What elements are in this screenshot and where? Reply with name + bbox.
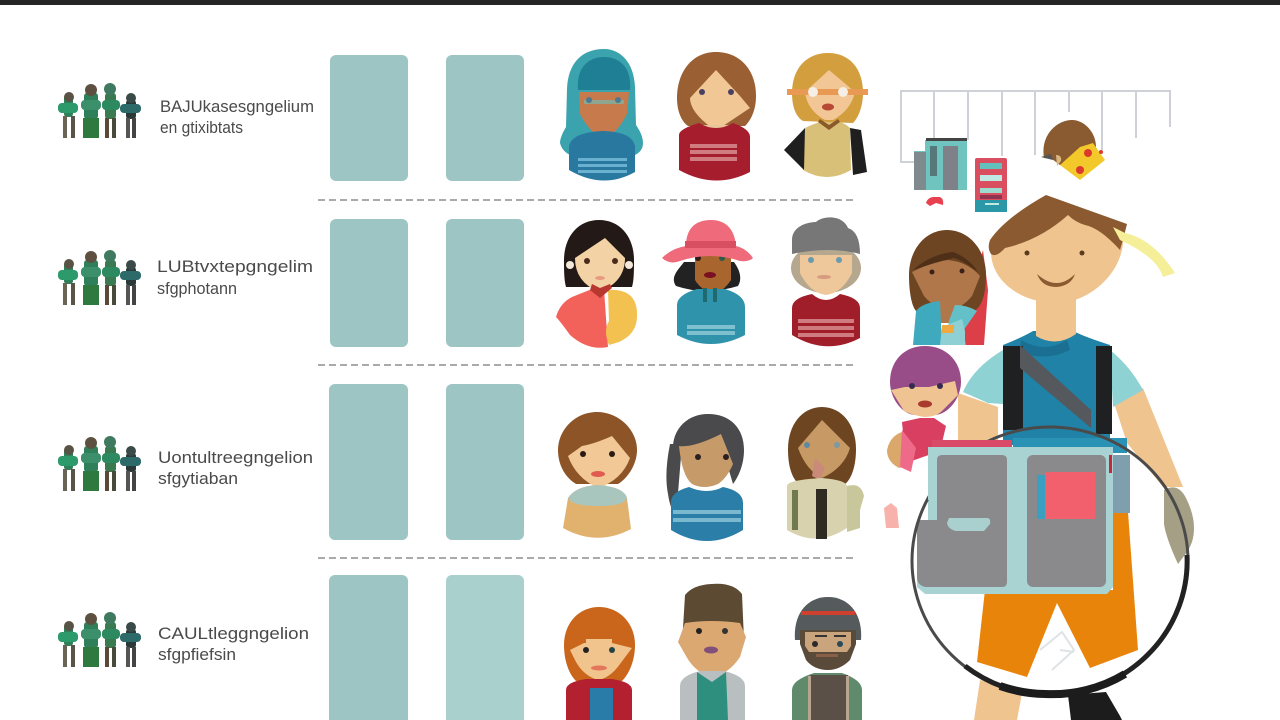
diagonal strap — [1020, 345, 1091, 428]
collar — [1020, 340, 1070, 357]
row 4: people icon — [58, 612, 141, 667]
avatar: woman with black hair — [556, 220, 637, 348]
bag top trim — [1013, 438, 1127, 453]
torso — [1003, 331, 1110, 445]
avatar: person with dark ponytail — [666, 414, 744, 541]
row 3: label: sfgytiaban — [158, 469, 238, 488]
right pocket — [1027, 455, 1106, 587]
row 1: label — [160, 97, 314, 137]
handle — [1068, 692, 1122, 720]
sleeves — [963, 350, 1143, 407]
open bag in magnifier — [917, 438, 1127, 594]
row 4: label: sfgpfiefsin — [158, 645, 236, 664]
left pocket — [917, 455, 1007, 587]
bag body — [917, 447, 1113, 594]
right arm — [1113, 388, 1183, 487]
magnifier — [912, 427, 1188, 720]
lens shadow arc — [965, 555, 1187, 695]
row 3: people icon — [58, 436, 141, 491]
row 1: label: BAJUkasesgngelium — [160, 97, 314, 116]
row 3: card A — [329, 384, 408, 540]
hair — [989, 195, 1127, 255]
divider 3 — [318, 557, 855, 559]
blue notebook edge — [1037, 475, 1045, 519]
lens thick arc — [1000, 674, 1125, 694]
pocket clasp — [947, 518, 990, 531]
icon: small pink cup — [884, 503, 899, 528]
row 2: card A — [330, 219, 408, 347]
red notebook — [1045, 472, 1095, 519]
avatar: person with orange hair — [564, 607, 635, 720]
hand — [1164, 487, 1194, 564]
icon: teal suitcase — [914, 138, 967, 190]
icon: brown head with yellow crown — [1041, 120, 1105, 180]
side panel — [1113, 455, 1130, 513]
head — [991, 200, 1123, 303]
avatar: woman in teal headscarf — [560, 49, 643, 181]
thigh gap glass — [1040, 632, 1074, 670]
avatar: woman with long brown hair and coat — [787, 407, 864, 539]
row 3: label — [158, 448, 313, 488]
avatar: woman with pink hat — [662, 220, 753, 344]
row 4: label — [158, 624, 309, 664]
bag corner over ring — [928, 440, 1012, 505]
row 2: card B — [446, 219, 524, 347]
person: girl with purple hair — [887, 346, 961, 472]
row 2: people icon — [58, 250, 141, 305]
person: woman with long brown hair — [909, 230, 988, 345]
avatar: blonde woman with glasses — [784, 53, 868, 177]
avatar: bearded man with beanie — [792, 597, 862, 720]
row 2: label — [157, 257, 313, 298]
red tab — [1109, 455, 1112, 473]
comb chart — [901, 91, 1170, 162]
legs — [974, 680, 1022, 720]
person: main figure holding bag — [958, 195, 1194, 720]
straps — [1003, 346, 1112, 434]
avatar: older person with grey hat — [791, 217, 861, 346]
avatar: woman with curly brown hair — [558, 412, 637, 538]
row 3: label: Uontultreegngelion — [158, 448, 313, 467]
row 1: label: en gtixibtats — [160, 118, 243, 137]
icon: phone list — [975, 158, 1007, 212]
row 1: people icon — [58, 83, 141, 138]
row 1: card A — [330, 55, 408, 181]
icon: red mini tag — [926, 197, 943, 206]
divider 2 — [318, 364, 855, 366]
lens ring — [912, 427, 1188, 695]
yellow ribbon — [1113, 227, 1175, 277]
row 4: card A — [329, 575, 408, 720]
neck — [1036, 295, 1076, 342]
avatar: man with brown hair — [678, 584, 746, 720]
left arm — [958, 393, 998, 447]
row 3: card B — [446, 384, 524, 540]
row 4: label: CAULtleggngelion — [158, 624, 309, 643]
divider 1 — [318, 199, 855, 201]
row 2: label: sfgphotann — [157, 279, 237, 298]
avatar: woman with brown hair — [677, 52, 756, 181]
row 4: card B — [446, 575, 524, 720]
row 2: label: LUBtvxtepgngelim — [157, 257, 313, 276]
top bar — [0, 0, 1280, 5]
row 1: card B — [446, 55, 524, 181]
pants — [977, 512, 1138, 677]
